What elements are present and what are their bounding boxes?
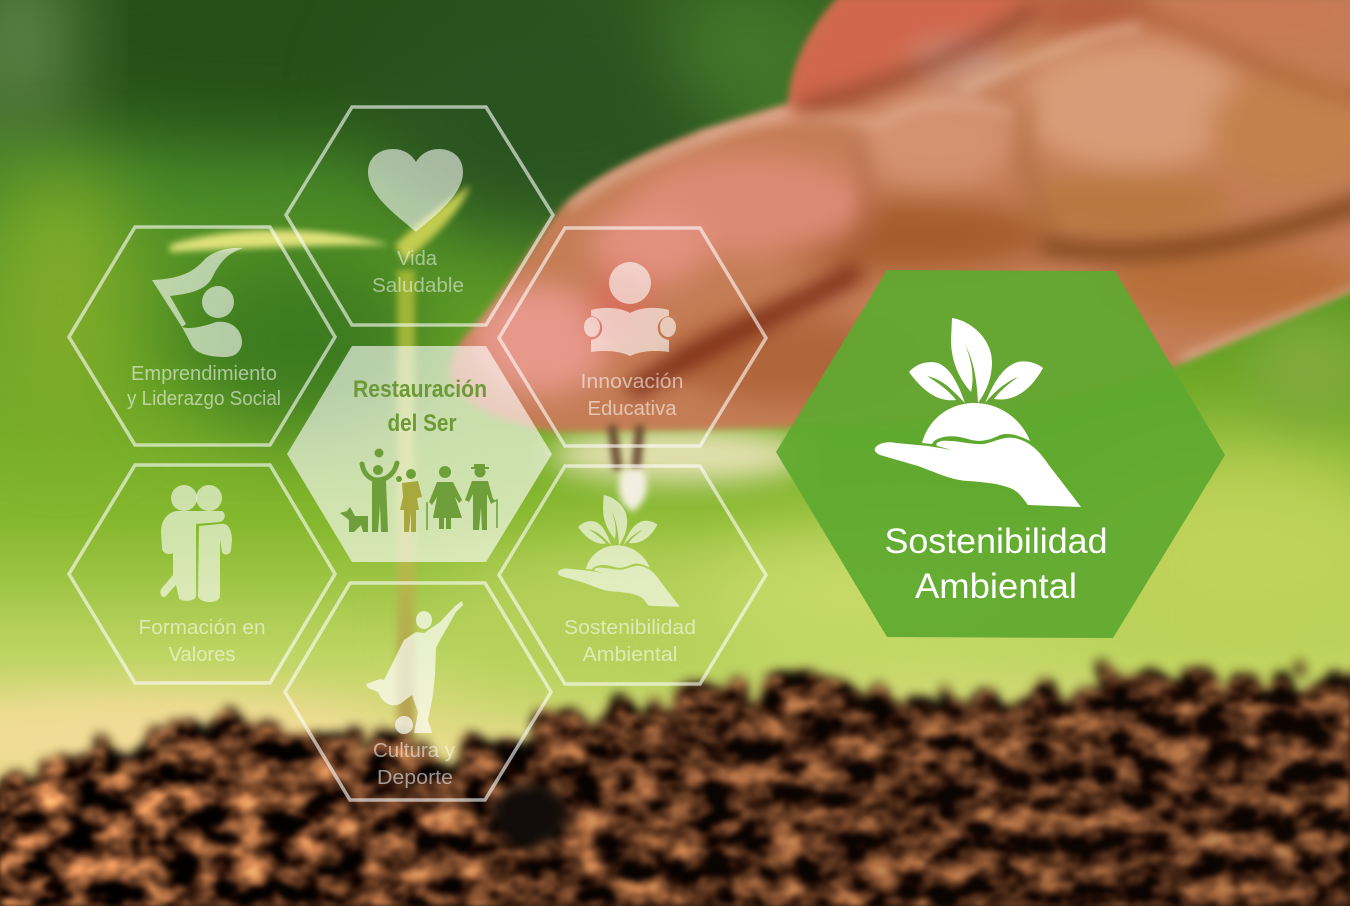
- hexagon: Vida Saludable: [286, 107, 553, 325]
- label: Innovación Educativa: Innovación: [580, 371, 684, 393]
- icon: embracing couple: [160, 485, 232, 602]
- elderly woman with cane: [427, 466, 462, 530]
- icon: plant in hand small: [558, 495, 680, 607]
- parent holding child: [396, 469, 422, 532]
- heading: Restauración del Ser: del Ser: [388, 410, 456, 437]
- icon: family figures: [340, 448, 497, 532]
- hexagon: Sostenibilidad Ambiental small: [499, 466, 766, 684]
- label: Vida Saludable: Saludable: [372, 275, 464, 297]
- soil: [0, 695, 380, 775]
- hexagon: Innovación Educativa: [499, 228, 766, 446]
- icon: heart: [368, 149, 463, 232]
- label: Emprendimiento y Liderazgo Social: Emprendimiento: [131, 363, 277, 385]
- elderly man with cane: [465, 464, 497, 530]
- icon: person with flag: [152, 248, 243, 357]
- label: Formación en Valores: Valores: [168, 644, 236, 666]
- icon: plant in hand large: [875, 318, 1081, 507]
- icon: person reading a book: [584, 262, 676, 356]
- label: Formación en Valores: Formación en: [138, 617, 266, 639]
- man with child on shoulders: [362, 448, 397, 532]
- label: Sostenibilidad Ambiental large: Sostenibilidad: [884, 522, 1108, 561]
- heading: Restauración del Ser: Restauración: [353, 376, 487, 403]
- icon: soccer player: [366, 601, 463, 734]
- dog: [340, 507, 368, 532]
- water drip below fingers: [612, 425, 640, 470]
- hexagon: Emprendimiento y Liderazgo Social: [69, 227, 335, 445]
- hexagon: Formación en Valores: [69, 465, 335, 683]
- pale glow below the hand: [550, 427, 810, 483]
- label: Sostenibilidad Ambiental small: Ambiental: [582, 644, 678, 666]
- label: Cultura y Deporte: Cultura y: [373, 740, 455, 762]
- hexagon: Cultura y Deporte: [285, 583, 551, 800]
- label: Innovación Educativa: Educativa: [588, 398, 677, 420]
- label: Sostenibilidad Ambiental small: Sostenibilidad: [564, 617, 696, 639]
- hexagon: Restauración del Ser (center): [287, 346, 552, 562]
- label: Sostenibilidad Ambiental large: Ambiental: [915, 567, 1077, 606]
- plant stem and leaves: [397, 270, 415, 740]
- hand: [430, 0, 1350, 450]
- panel: Sostenibilidad Ambiental large hexagon: [776, 270, 1225, 638]
- label: Cultura y Deporte: Deporte: [377, 767, 453, 789]
- label: Vida Saludable: Vida: [397, 248, 438, 270]
- label: Emprendimiento y Liderazgo Social: y Liderazgo Social: [127, 388, 281, 410]
